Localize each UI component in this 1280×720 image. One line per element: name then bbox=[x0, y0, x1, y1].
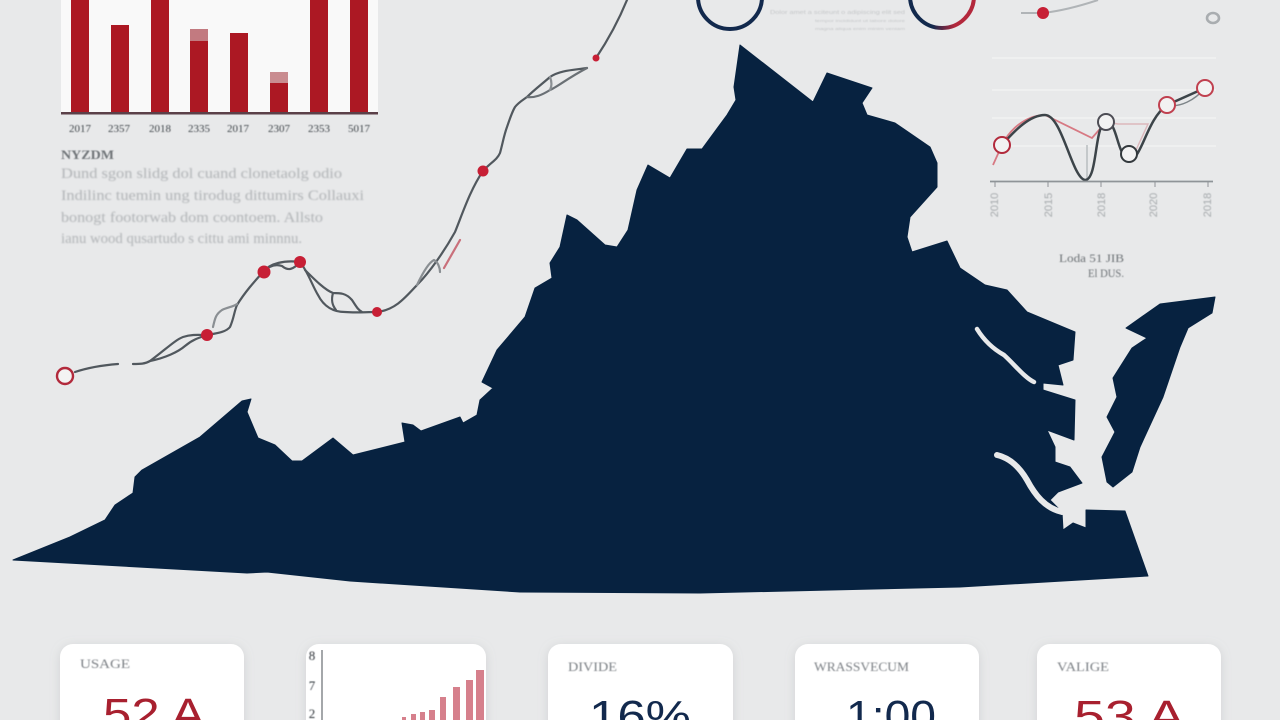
KPI card 1 bbox=[60, 644, 244, 720]
KPI card 2: mini bar chart: 7 bbox=[309, 678, 316, 693]
icon: small ring bbox=[1207, 13, 1219, 23]
text block: chart note: Dund sgon slidg dol cuand clonetaolg odio bbox=[61, 166, 342, 182]
line chart caption bbox=[1059, 251, 1124, 280]
line chart caption: El DUS. bbox=[1088, 266, 1124, 280]
caption between rings: tempor incididunt ut labore dolore bbox=[815, 18, 906, 23]
KPI card 2: mini bar chart bbox=[306, 644, 486, 720]
text block: chart note: NYZDM bbox=[61, 147, 114, 162]
line chart: 2010 bbox=[989, 193, 1001, 217]
map: Eastern Shore bbox=[1102, 297, 1215, 487]
bar chart: 2335 bbox=[188, 123, 210, 135]
line chart: 2015 bbox=[1043, 193, 1055, 217]
map: Virginia mainland bbox=[13, 45, 1148, 593]
bar chart: 2357 bbox=[108, 123, 130, 135]
KPI card 3 bbox=[548, 644, 733, 720]
KPI card 5: VALIGE bbox=[1057, 659, 1109, 674]
bar chart: 2353 bbox=[308, 123, 330, 135]
bar chart: 2018 bbox=[149, 123, 172, 135]
KPI card 2: mini bar chart: 8 bbox=[309, 648, 315, 663]
bar chart: 5017 bbox=[348, 123, 370, 135]
KPI card 5 bbox=[1037, 644, 1221, 720]
bar chart: 2017 bbox=[69, 123, 92, 135]
bar chart: 2307 bbox=[268, 123, 290, 135]
line chart: 2018 bbox=[1202, 193, 1214, 217]
text block: chart note bbox=[61, 147, 364, 247]
bar chart: 2017 bbox=[227, 123, 250, 135]
line chart: 2020 bbox=[1148, 193, 1160, 217]
KPI card 3: DIVIDE bbox=[568, 659, 617, 674]
trend markers bbox=[57, 54, 600, 384]
line chart bbox=[989, 58, 1216, 217]
gauge ring: right bbox=[910, 0, 974, 28]
caption between rings: magna aliqua enim minim veniam bbox=[815, 26, 906, 31]
trend route line bbox=[75, 0, 627, 372]
top right trend fragment bbox=[1021, 0, 1098, 19]
text block: chart note: bonogt footorwab dom coontoem. Allsto bbox=[61, 210, 323, 226]
text block: chart note: ianu wood qusartudo s cittu ami minnnu. bbox=[61, 231, 302, 247]
bar chart bbox=[61, 0, 378, 135]
KPI card 4 bbox=[795, 644, 979, 720]
KPI card 1: USAGE bbox=[80, 656, 130, 671]
caption between rings: Dolor amet a sciteunt o adipiscing elit sed bbox=[770, 10, 905, 16]
line chart caption: Loda 51 JIB bbox=[1059, 251, 1124, 265]
line chart: 2018 bbox=[1096, 193, 1108, 217]
gauge ring: left bbox=[698, 0, 762, 29]
caption between rings bbox=[770, 10, 906, 31]
text block: chart note: Indilinc tuemin ung tirodug dittumirs Collauxi bbox=[61, 188, 364, 204]
map: river inlets bbox=[977, 329, 1062, 512]
KPI card 4: WRASSVECUM bbox=[814, 659, 909, 674]
